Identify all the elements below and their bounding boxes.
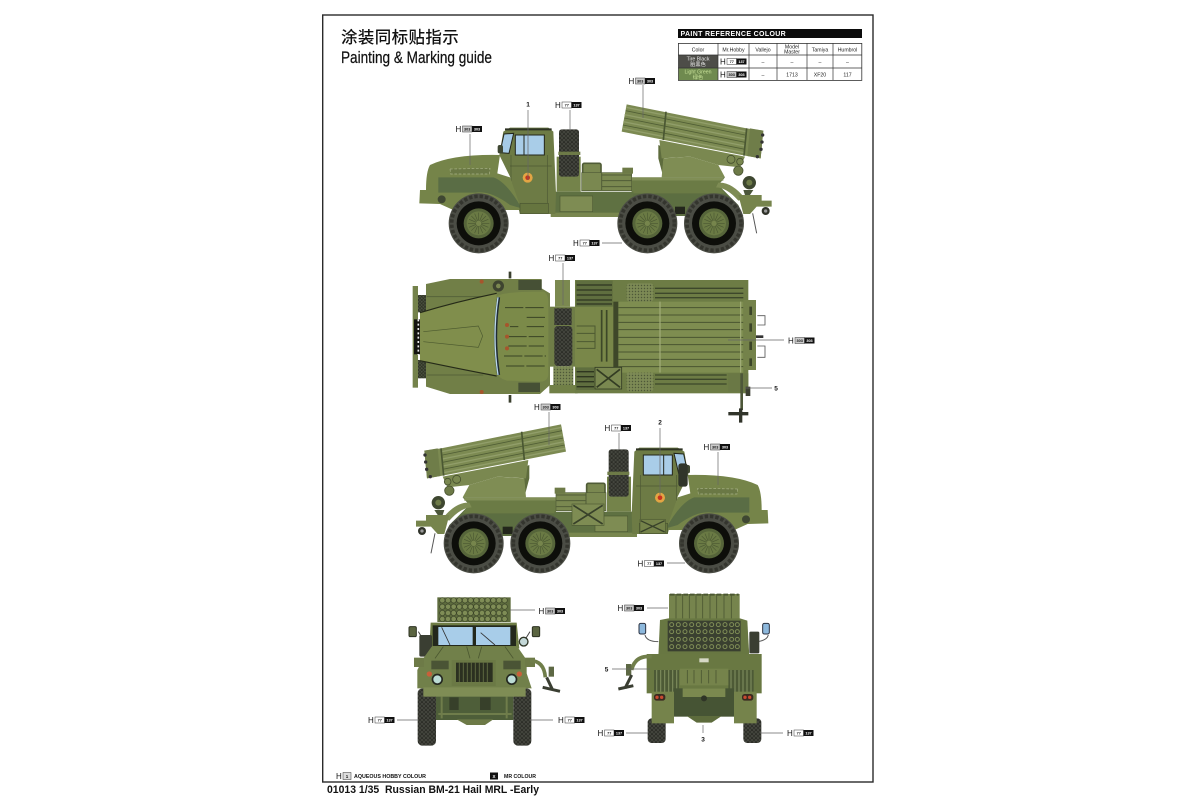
colour callout: right tyre, front view: H <box>558 716 564 725</box>
colour callout: launcher, left view: 303 <box>637 79 643 83</box>
colour key: X <box>492 774 496 779</box>
decal numbers: 5 <box>605 666 609 674</box>
colour callout: launcher, left view: H <box>628 77 634 86</box>
decal numbers: 5 <box>774 386 778 392</box>
colour callout: spare tyre, right view: 77 <box>614 426 618 430</box>
table text: Humbrol <box>838 48 857 54</box>
colour callout: left tyre, front view <box>368 716 394 725</box>
page frame <box>323 15 873 782</box>
colour callout: spare tyre, left view <box>555 101 582 110</box>
colour callout: wheels, left view: H <box>573 239 579 248</box>
colour callout: spare tyre, left view: 137 <box>573 103 580 107</box>
table text <box>684 44 857 81</box>
colour callout: right tyre, rear view: 137 <box>805 731 812 735</box>
table text: 117 <box>843 72 852 78</box>
table text: Model <box>785 44 799 50</box>
colour callout: launcher, left view: 303 <box>647 79 653 83</box>
colour callout: hood, right view: H <box>704 443 710 452</box>
colour callout: wheels, right view: 137 <box>656 562 662 566</box>
colour callout: right tyre, front view: 137 <box>576 718 583 722</box>
colour callout: hood, left view: 303 <box>474 127 480 131</box>
colour callout: launcher, top view <box>788 336 814 346</box>
colour callout: launcher, front view: H <box>538 607 544 616</box>
colour callout: left tyre, front view: 137 <box>386 718 393 722</box>
colour callout: launcher, rear view: H <box>618 604 624 613</box>
colour callout: launcher, top view: 303 <box>797 339 803 343</box>
colour key <box>336 772 536 781</box>
colour callout: right tyre, front view: 77 <box>568 718 572 722</box>
colour callout: launcher, right view: H <box>534 403 540 412</box>
table grid <box>678 43 862 80</box>
colour callout: right tyre, rear view: 77 <box>797 731 801 735</box>
table text: Color <box>692 48 704 54</box>
colour callout: left tyre, front view: H <box>368 716 374 725</box>
colour callout: hood, right view: 303 <box>712 445 718 449</box>
colour callout: wheels, left view: 137 <box>591 241 598 245</box>
table paint codes: 303 <box>738 73 745 77</box>
colour callout: launcher, front view: 303 <box>557 609 563 613</box>
table heading <box>678 29 862 38</box>
colour callout: wheels, left view: 77 <box>583 241 587 245</box>
colour callout: left tyre, rear view: 77 <box>607 731 611 735</box>
table text: – <box>791 60 794 66</box>
title: 涂装同标贴指示 <box>341 24 459 48</box>
table text: Master <box>784 50 800 56</box>
table text: – <box>762 72 765 78</box>
colour callout: left tyre, rear view: H <box>598 729 604 738</box>
table text: 绿色 <box>693 73 703 81</box>
X crate on locker <box>572 504 604 525</box>
X panel on cab <box>640 519 665 533</box>
colour callout: launcher, right view: 303 <box>543 405 549 409</box>
table paint codes: 303 <box>729 73 735 77</box>
decal numbers: 1 <box>526 102 530 108</box>
decal numbers: 3 <box>701 736 705 744</box>
table paint codes: H <box>720 58 726 66</box>
table text: – <box>762 60 765 66</box>
colour callout: spare tyre, top view <box>548 254 575 263</box>
title <box>341 24 492 67</box>
colour callout: left tyre, rear view <box>598 729 624 738</box>
colour callout: launcher, right view <box>534 403 560 412</box>
colour callout: launcher, left view <box>628 77 655 86</box>
door mirror <box>678 463 688 487</box>
colour callout: spare tyre, top view: 77 <box>558 256 562 260</box>
colour callout: hood, right view: 303 <box>722 445 728 449</box>
truck: left side view <box>419 104 772 253</box>
colour callout: hood, left view <box>456 125 482 134</box>
truck: front view <box>409 597 560 746</box>
table heading: PAINT REFERENCE COLOUR <box>680 31 786 38</box>
title: Painting & Marking guide <box>341 48 492 67</box>
table text: XF20 <box>814 72 826 78</box>
table text: 1713 <box>786 72 798 78</box>
decal numbers <box>526 102 778 744</box>
colour callout: launcher, rear view: 303 <box>636 606 642 610</box>
colour key: H <box>336 772 342 781</box>
colour callout: launcher, top view: H <box>788 336 794 346</box>
colour callout: hood, left view: H <box>456 125 462 134</box>
colour callout: right tyre, rear view <box>787 729 814 738</box>
footer product line: 01013 1/35 Russian BM-21 Hail MRL -Early <box>327 784 540 796</box>
colour callout: wheels, right view <box>638 560 664 568</box>
colour callout: spare tyre, right view: 137 <box>623 426 629 430</box>
table text: – <box>819 60 822 66</box>
table text: Tire Black <box>687 56 710 62</box>
truck: right side view <box>416 424 768 573</box>
table text: Vallejo <box>755 48 771 54</box>
truck: rear view <box>618 594 769 743</box>
colour callout: launcher, front view <box>538 607 565 616</box>
colour callout: spare tyre, left view: H <box>555 101 561 110</box>
colour key: MR COLOUR <box>504 774 536 780</box>
colour callout: hood, left view: 303 <box>464 127 470 131</box>
colour callout: launcher, rear view: 303 <box>626 606 632 610</box>
colour callout: spare tyre, top view: 137 <box>567 256 573 260</box>
table paint codes: 137 <box>738 60 745 64</box>
colour callout: right tyre, front view <box>558 716 584 725</box>
colour key: AQUEOUS HOBBY COLOUR <box>354 774 426 780</box>
colour callout: wheels, right view: H <box>638 560 644 568</box>
callout lines <box>397 85 784 733</box>
table text: 胎黑色 <box>690 60 706 68</box>
decal numbers: 2 <box>658 420 662 426</box>
colour callout: spare tyre, left view: 77 <box>565 103 569 107</box>
colour callout: wheels, right view: 77 <box>647 562 651 566</box>
colour callout: left tyre, front view: 77 <box>378 718 382 722</box>
truck: top view <box>413 272 765 423</box>
table text: Light Green <box>684 70 712 76</box>
table paint codes: H <box>720 70 726 80</box>
paint reference table <box>678 29 862 81</box>
table text: Mr.Hobby <box>722 48 745 54</box>
colour callout: wheels, left view <box>573 239 600 248</box>
colour callout: right tyre, rear view: H <box>787 729 793 738</box>
colour callout: left tyre, rear view: 137 <box>616 731 622 735</box>
colour callout: spare tyre, right view <box>604 424 631 433</box>
colour callout: spare tyre, right view: H <box>604 424 610 433</box>
colour callout: launcher, right view: 303 <box>552 405 559 409</box>
table text: Tamiya <box>812 48 828 54</box>
colour callout: hood, right view <box>704 443 730 452</box>
table text: – <box>846 60 849 66</box>
colour callout: spare tyre, top view: H <box>548 254 554 263</box>
colour callout: launcher, front view: 303 <box>547 609 553 613</box>
table paint codes: 77 <box>730 60 734 64</box>
table paint codes <box>720 58 746 80</box>
colour key: 1 <box>346 774 349 779</box>
colour callout: launcher, top view: 303 <box>806 339 813 343</box>
colour callout: launcher, rear view <box>618 604 644 613</box>
